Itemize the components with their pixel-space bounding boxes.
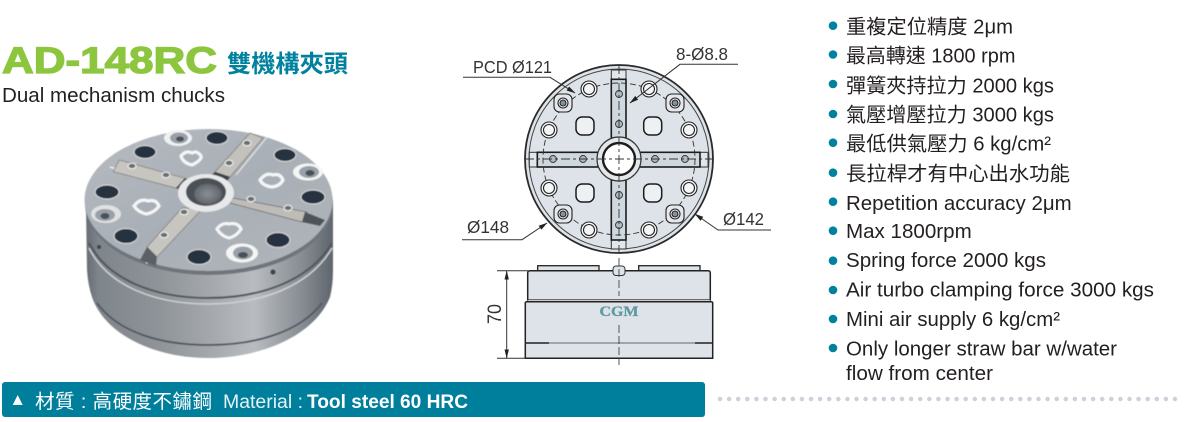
kidney pockets xyxy=(134,152,283,238)
title: Chinese product name: 雙機構夾頭 xyxy=(227,51,348,78)
title: model number: AD-148RC xyxy=(2,39,217,81)
white octagon pockets xyxy=(91,130,323,262)
spec list: English xyxy=(829,193,1154,385)
radial jaws xyxy=(110,133,325,266)
subtitle: Dual mechanism chucks xyxy=(2,85,225,107)
technical drawing: side view xyxy=(525,258,713,365)
channel highlights xyxy=(110,167,178,187)
dimension: mounting hole xyxy=(630,44,738,103)
dimension: inner diameter xyxy=(695,209,771,230)
NE jaw xyxy=(215,133,263,177)
slots xyxy=(529,70,708,249)
dimension: PCD: PCD Ø121 xyxy=(473,57,552,77)
hub and bore xyxy=(597,137,641,181)
dimension: outer diameter xyxy=(462,217,547,240)
bullet item: flow from center xyxy=(846,363,993,385)
dimension: height xyxy=(485,271,528,358)
dimension labels: top view xyxy=(462,44,771,240)
mounting holes xyxy=(541,81,697,238)
bullet item: 彈簧夾持拉力 2000 kgs xyxy=(846,74,1054,98)
icon: triangle xyxy=(13,395,23,405)
dimension: height: 70 xyxy=(485,304,506,324)
bullet item: Repetition accuracy 2μm xyxy=(846,193,1072,215)
dimension: inner diameter: Ø142 xyxy=(723,209,764,229)
material text: Chinese: 材質 : 高硬度不鏽鋼 xyxy=(35,391,212,413)
dimension: outer diameter: Ø148 xyxy=(467,217,509,237)
technical drawing: top view xyxy=(525,65,713,253)
top-view jaws xyxy=(537,79,700,240)
jaw screws xyxy=(550,90,688,228)
octagonal pockets xyxy=(554,94,684,223)
bullet item xyxy=(829,339,1117,385)
NW jaw xyxy=(113,160,185,188)
watermark: CGM xyxy=(600,304,638,320)
bolt holes xyxy=(95,132,325,264)
dimension: mounting hole: 8-Ø8.8 xyxy=(676,44,728,64)
bullet item: 長拉桿才有中心出水功能 xyxy=(846,163,1070,186)
product photo: chuck xyxy=(84,129,333,358)
dotted rule xyxy=(720,397,1182,401)
chuck body xyxy=(86,205,333,358)
material text: value: Tool steel 60 HRC xyxy=(307,391,468,413)
material text: English label: Material : xyxy=(223,392,303,413)
SE jaw xyxy=(230,198,307,222)
bullet item: Spring force 2000 kgs xyxy=(846,250,1046,272)
centre lines xyxy=(525,65,713,253)
spec list: Chinese xyxy=(829,15,1070,186)
PCD dashed circle xyxy=(543,83,695,235)
bullet item: Mini air supply 6 kg/cm² xyxy=(846,309,1060,331)
kidney pockets xyxy=(576,117,662,202)
bullet item: 氣壓增壓拉力 3000 kgs xyxy=(846,104,1054,126)
bullet item: 最高轉速 1800 rpm xyxy=(846,45,1016,68)
jaw bolts xyxy=(128,140,292,238)
SW jaw xyxy=(147,208,203,257)
centre bore xyxy=(178,174,234,212)
chuck top plate xyxy=(84,129,332,271)
bullet item: Max 1800rpm xyxy=(846,221,972,243)
bullet item: Only longer straw bar w/water xyxy=(846,339,1117,361)
bullet item: 重複定位精度 2μm xyxy=(846,15,1013,38)
bullet item: 最低供氣壓力 6 kg/cm² xyxy=(846,133,1051,156)
dimension: PCD xyxy=(463,57,575,93)
bullet item: Air turbo clamping force 3000 kgs xyxy=(846,280,1154,302)
material bar xyxy=(2,382,705,417)
